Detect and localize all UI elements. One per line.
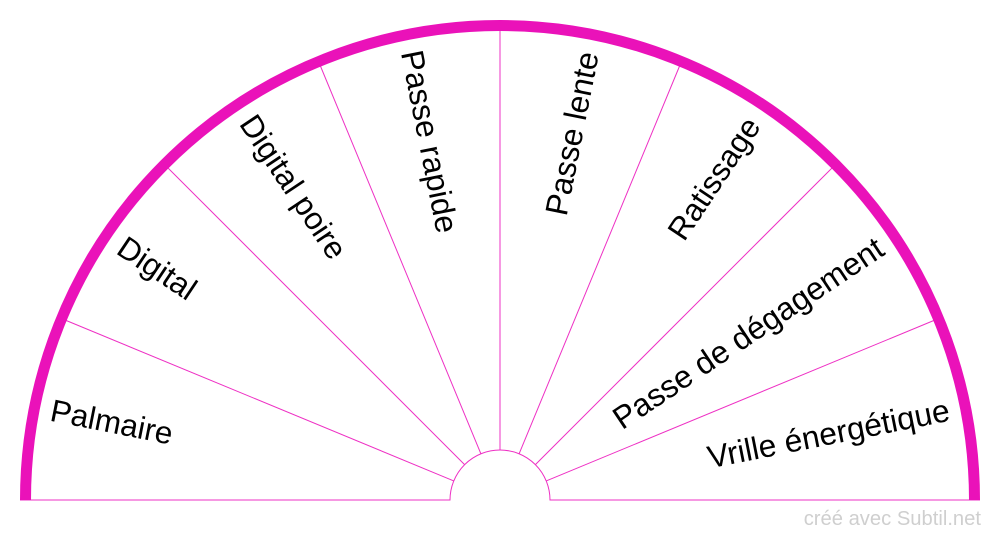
spokes dividing the sectors [65,30,935,481]
label: Passe lente: Passe lente [538,49,606,218]
label: Passe rapide: Passe rapide [394,47,465,236]
label: Vrille énergétique: Vrille énergétique [704,392,953,475]
watermark credit: créé avec Subtil.net [804,508,981,530]
label: Digital: Digital [111,230,203,307]
label: Passe de dégagement: Passe de dégagement [606,230,890,436]
sector labels [47,47,953,475]
label: Ratissage: Ratissage [661,111,767,246]
baseline and inner hub arc [20,450,980,500]
label: Palmaire: Palmaire [47,393,176,451]
label: Digital poire: Digital poire [233,108,354,266]
